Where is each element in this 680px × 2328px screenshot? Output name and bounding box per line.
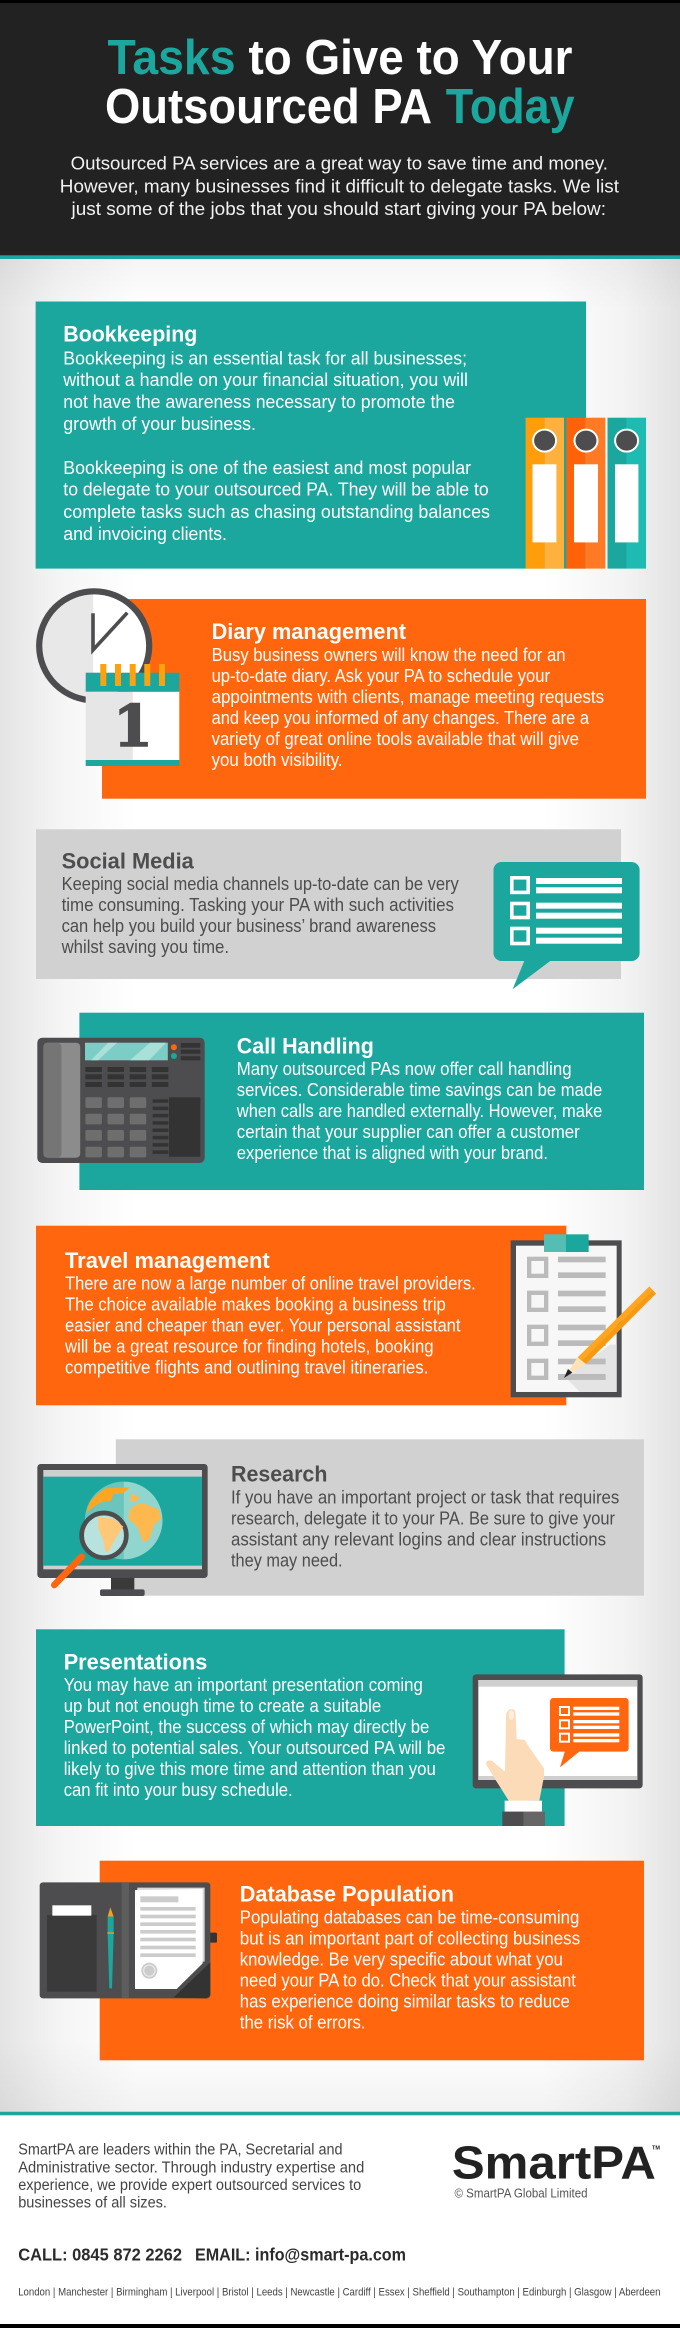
body text: presentations	[64, 1675, 445, 1800]
logo: SmartPA: SmartPA	[452, 2136, 656, 2188]
logo: SmartPA: © SmartPA Global Limited	[454, 2187, 588, 2201]
body text: call handling: certain that your supplier can offer a customer	[237, 1122, 580, 1142]
body text: travel management: will be a great resource for finding hotels, booking	[64, 1336, 434, 1356]
body text: database population: the risk of errors.	[240, 2012, 366, 2032]
heading: bookkeeping: Bookkeeping	[63, 322, 197, 346]
body text: travel management: There are now a large number of online travel providers.	[65, 1273, 476, 1293]
heading: presentations: Presentations	[64, 1650, 207, 1675]
body text: bookkeeping: growth of your business.	[63, 414, 256, 434]
panel: presentations	[36, 1629, 643, 1826]
body text: social media: Keeping social media channels up-to-date can be very	[62, 874, 459, 894]
body text: research: assistant any relevant logins and clear instructions	[231, 1529, 606, 1549]
body text: database population	[240, 1907, 580, 2032]
body text: bookkeeping: without a handle on your financial situation, you will	[62, 370, 468, 390]
body text: research	[231, 1487, 619, 1570]
icon: clock	[35, 588, 151, 703]
body text: bookkeeping: complete tasks such as chasing outstanding balances	[63, 502, 490, 522]
body text: call handling: when calls are handled externally. However, make	[236, 1101, 602, 1121]
body text: call handling: experience that is aligned with your brand.	[237, 1143, 548, 1163]
body text: database population: has experience doing similar tasks to reduce	[240, 1991, 570, 2011]
body text: call handling: services. Considerable time savings can be made	[237, 1080, 602, 1100]
icon: clipboard with pencil	[511, 1234, 656, 1397]
body text: database population: Populating databases can be time-consuming	[240, 1907, 579, 1927]
contact details: CALL: 0845 872 2262	[18, 2245, 182, 2265]
company description: SmartPA are leaders within the PA, Secretarial and	[18, 2142, 343, 2159]
title: Tasks	[108, 31, 236, 85]
company description	[18, 2142, 364, 2212]
contact details	[18, 2245, 406, 2265]
panel: database population	[40, 1861, 644, 2060]
icon: binders	[526, 418, 646, 569]
icon: desk phone	[37, 1038, 205, 1163]
intro text: Outsourced PA services are a great way to save time and money.	[71, 152, 608, 173]
title	[105, 31, 575, 134]
heading: call handling: Call Handling	[237, 1033, 374, 1058]
body text: research: they may need.	[231, 1550, 343, 1570]
panel: call handling	[37, 1013, 644, 1190]
body text: travel management: easier and cheaper than ever. Your personal assistant	[65, 1315, 460, 1335]
body text: diary management: Busy business owners will know the need for an	[212, 645, 566, 665]
heading: social media: Social Media	[62, 848, 194, 873]
icon: monitor with globe	[37, 1464, 208, 1596]
company description: businesses of all sizes.	[18, 2195, 167, 2212]
body text: presentations: You may have an important presentation coming	[64, 1675, 423, 1695]
heading: research: Research	[231, 1462, 327, 1487]
body text: presentations: can fit into your busy schedule.	[64, 1780, 293, 1800]
company description: Administrative sector. Through industry expertise and	[18, 2159, 364, 2176]
body text: diary management	[212, 645, 604, 770]
header band	[0, 0, 680, 259]
body text: bookkeeping: not have the awareness necessary to promote the	[63, 392, 455, 412]
heading: database population: Database Population	[240, 1882, 454, 1907]
body text: bookkeeping: to delegate to your outsourced PA. They will be able to	[63, 480, 489, 500]
body text: presentations: up but not enough time to create a suitable	[64, 1696, 381, 1716]
body text: diary management: variety of great online tools available that will give	[212, 729, 579, 749]
body text: diary management: and keep you informed of any changes. There are a	[212, 708, 590, 728]
body text: database population: need your PA to do. Check that your assistant	[240, 1970, 576, 1990]
contact details: EMAIL: info@smart-pa.com	[195, 2245, 406, 2265]
body text: social media: time consuming. Tasking your PA with such activities	[62, 895, 454, 915]
body text: diary management: up-to-date diary. Ask your PA to schedule your	[212, 666, 550, 686]
panel: travel management	[36, 1226, 656, 1405]
body text: travel management	[64, 1273, 476, 1377]
body text: social media: whilst saving you time.	[61, 937, 229, 957]
company description: experience, we provide expert outsourced services to	[18, 2177, 361, 2194]
globe	[85, 1482, 162, 1559]
body text: travel management: competitive flights and outlining travel itineraries.	[65, 1357, 428, 1377]
body text: bookkeeping: Bookkeeping is one of the easiest and most popular	[63, 458, 471, 478]
body text: database population: but is an important part of collecting business	[240, 1928, 580, 1948]
icon: speech bubble checklist	[494, 862, 640, 989]
icon: calendar: 1	[113, 693, 153, 760]
body text: social media: can help you build your business’ brand awareness	[62, 916, 436, 936]
heading: travel management: Travel management	[65, 1248, 270, 1273]
intro text: However, many businesses find it difficult to delegate tasks. We list	[60, 175, 619, 196]
body text: bookkeeping: and invoicing clients.	[63, 524, 227, 544]
panel: research	[37, 1439, 644, 1596]
body text: bookkeeping	[62, 348, 490, 544]
panel: social media	[36, 829, 640, 989]
logo: SmartPA: TM	[652, 2146, 660, 2152]
body text: social media	[61, 874, 459, 957]
body text: call handling	[236, 1059, 602, 1163]
body text: research: If you have an important project or task that requires	[231, 1487, 619, 1507]
intro text	[60, 152, 619, 219]
body text: presentations: linked to potential sales. Your outsourced PA will be	[64, 1738, 445, 1758]
title: Today	[446, 80, 575, 134]
body text: presentations: PowerPoint, the success of which may directly be	[64, 1717, 429, 1737]
icon: tablet with pointing hand	[473, 1674, 643, 1826]
magnifier	[54, 1513, 126, 1585]
heading: diary management: Diary management	[212, 619, 406, 644]
icon: calendar	[86, 664, 179, 766]
body text: travel management: The choice available makes booking a business trip	[65, 1294, 446, 1314]
body text: research: research, delegate it to your PA. Be sure to give your	[231, 1508, 615, 1528]
intro text: just some of the jobs that you should start giving your PA below:	[70, 198, 606, 219]
panel: bookkeeping	[36, 302, 646, 569]
body text: call handling: Many outsourced PAs now offer call handling	[237, 1059, 572, 1079]
footer	[0, 2112, 680, 2328]
body text: diary management: appointments with clients, manage meeting requests	[212, 687, 604, 707]
body text: diary management: you both visibility.	[212, 750, 343, 770]
panel: diary management	[35, 588, 646, 799]
title: to Give to Your	[248, 31, 572, 85]
body text: bookkeeping: Bookkeeping is an essential task for all businesses;	[63, 348, 467, 368]
body text: presentations: likely to give this more time and attention than you	[64, 1759, 436, 1779]
icon: open folder with document and pen	[40, 1882, 217, 1998]
body text: database population: knowledge. Be very specific about what you	[240, 1949, 563, 1969]
title: Outsourced PA	[105, 80, 432, 134]
